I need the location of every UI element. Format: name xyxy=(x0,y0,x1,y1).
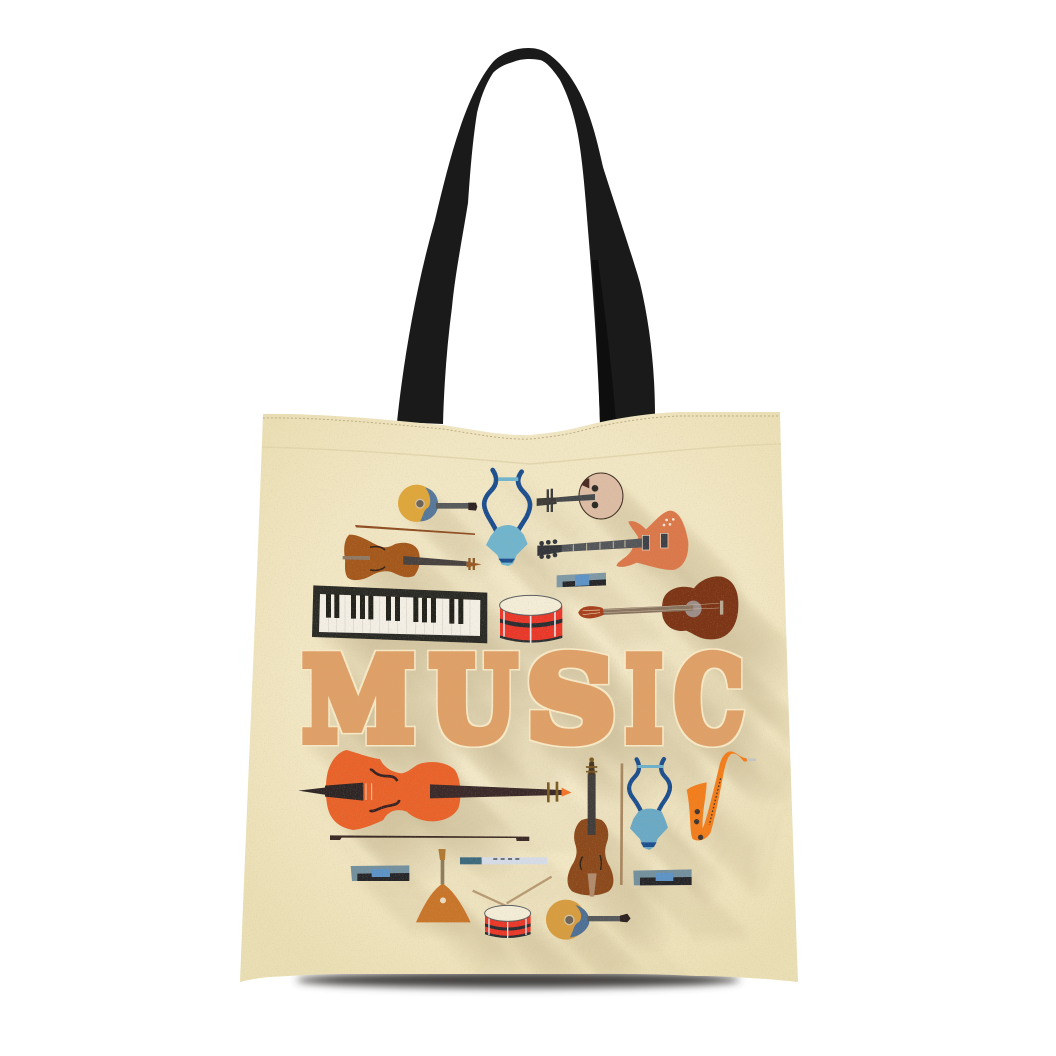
icon: flute xyxy=(460,857,547,864)
icon: saxophone xyxy=(687,751,756,840)
icon: bass guitar xyxy=(537,511,688,570)
icon: cello bow xyxy=(330,835,529,841)
icon: lyre xyxy=(629,759,670,850)
icon: harmonica xyxy=(557,573,606,587)
title: MUSIC xyxy=(303,634,743,766)
icon: mandolin xyxy=(398,485,477,522)
title: MUSIC: U xyxy=(430,634,516,766)
bag ground shadow xyxy=(296,972,740,988)
icon: acoustic guitar xyxy=(578,576,738,639)
icon: balalaika xyxy=(416,849,471,922)
title: MUSIC: C xyxy=(675,634,743,766)
icon: violin bow xyxy=(355,525,475,535)
bag body xyxy=(240,412,798,982)
icon: harmonica xyxy=(351,865,409,881)
artwork: instruments and title xyxy=(298,470,756,940)
icon: harmonica xyxy=(633,869,692,885)
fabric speckle texture xyxy=(235,408,803,986)
title: MUSIC: I xyxy=(626,634,662,766)
icon: lyre xyxy=(484,470,530,566)
icon: snare drum xyxy=(500,595,562,643)
icon: violin bow xyxy=(620,763,623,885)
icon: small snare drum xyxy=(485,905,531,938)
top instruments xyxy=(312,470,738,643)
icon: mandolin xyxy=(546,900,631,940)
icon: cello xyxy=(298,750,572,830)
title: MUSIC: S xyxy=(527,634,615,766)
icon: violin xyxy=(343,535,482,580)
title: MUSIC: M xyxy=(303,634,414,766)
icon: drumsticks xyxy=(472,876,552,906)
bag hem stitching xyxy=(262,416,781,464)
bottom instruments xyxy=(298,750,756,940)
icon: violin xyxy=(568,757,613,897)
icon: round banjo xyxy=(537,473,623,519)
icon: keyboard xyxy=(312,585,487,643)
handle: black strap xyxy=(397,48,655,424)
tote bag illustration xyxy=(240,48,798,995)
